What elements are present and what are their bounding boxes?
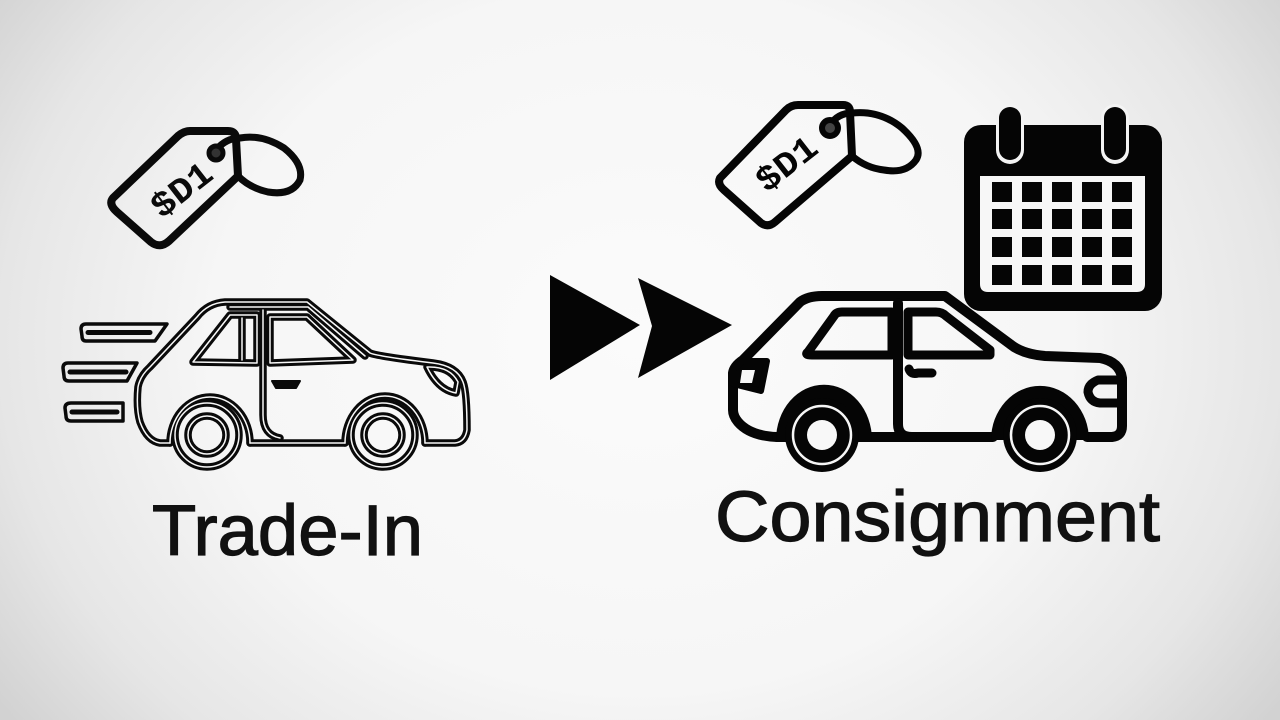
label: Trade-In: Trade-In: [152, 492, 423, 571]
speed lines: [63, 324, 167, 421]
door handle: [272, 381, 300, 388]
icon: calendar: [964, 104, 1162, 311]
icon: price tag, consignment: [719, 105, 918, 225]
icon: price tag, trade-in: $D1: [144, 155, 222, 228]
icon: double forward arrows: [550, 275, 732, 380]
icon: price tag, consignment: $D1: [749, 129, 827, 202]
icon: moving car, trade-in: [63, 302, 467, 467]
wheel: rear: [776, 385, 872, 472]
icon: price tag, trade-in: [111, 131, 301, 245]
label: Consignment: Consignment: [715, 478, 1160, 557]
wheel: front: [991, 386, 1089, 472]
icon: parked car, consignment: [733, 296, 1122, 472]
